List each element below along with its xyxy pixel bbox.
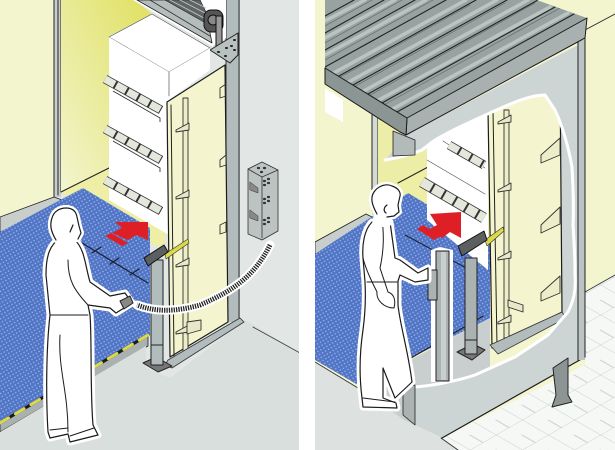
door rails and hinges	[176, 84, 226, 352]
wall-mounted control box	[248, 162, 278, 240]
roof canopy slats	[325, 0, 587, 118]
raised dock door panel	[167, 65, 228, 357]
white goods on pallets	[427, 105, 488, 270]
door frame strip	[54, 0, 61, 197]
operator head	[372, 185, 400, 224]
hand-held remote	[120, 296, 133, 309]
interior grey side behind door	[555, 60, 580, 350]
pallet 1	[105, 79, 161, 122]
door sill	[490, 312, 566, 354]
operator figure	[46, 208, 133, 442]
panel: right scene, operator using fixed control column	[315, 0, 615, 450]
red arrow	[417, 212, 461, 240]
hazard striped edge	[0, 335, 148, 432]
pallet 3	[105, 180, 161, 211]
front corner post	[403, 385, 415, 425]
back wall	[378, 118, 427, 184]
cut-away white outline	[385, 95, 575, 388]
pillar control post	[143, 245, 172, 372]
yellow strap	[485, 227, 504, 246]
left wall	[0, 0, 54, 217]
right post	[578, 25, 585, 360]
operator head	[51, 208, 81, 240]
door frame post	[226, 0, 240, 322]
pallet upper	[449, 145, 484, 165]
pallet 2	[105, 129, 161, 172]
yellow strap	[165, 239, 189, 259]
threshold bar	[0, 197, 62, 232]
wall edge line	[585, 14, 615, 30]
roof fascia	[406, 18, 587, 135]
side wall panel cut-away	[385, 45, 578, 438]
overhead door roller mechanism	[133, 0, 226, 46]
panel: left scene, operator using hand-held remote	[0, 0, 300, 450]
pallet lower	[422, 182, 484, 218]
support leg	[552, 358, 572, 407]
operator figure	[360, 185, 428, 408]
back floor	[61, 168, 165, 250]
ground floor	[315, 362, 458, 450]
door rails and hinges	[498, 110, 560, 338]
blue dock plate	[0, 188, 150, 423]
door sill	[165, 318, 244, 368]
operator hand and arm line	[363, 218, 397, 402]
red direction arrow	[105, 222, 148, 246]
white wall patch	[325, 88, 343, 122]
dock frame strip	[372, 115, 378, 215]
back wall	[61, 0, 152, 192]
operator body	[360, 222, 428, 408]
control column	[428, 247, 453, 382]
dock plate fold line marks	[82, 243, 148, 283]
support pillar	[457, 231, 487, 360]
stacked white goods on pallets	[109, 14, 210, 235]
back floor	[397, 168, 490, 238]
side wall lower edge	[442, 357, 585, 438]
blue dock plate	[315, 193, 490, 385]
raised door panel	[488, 75, 562, 348]
door gear under roof	[393, 131, 415, 156]
roof left edge	[325, 68, 407, 135]
ground floor	[0, 320, 300, 450]
coiled cable	[137, 245, 270, 310]
paved tiles	[442, 275, 615, 450]
threshold bar	[315, 214, 378, 254]
mounting bracket	[210, 33, 238, 63]
operator body	[46, 238, 132, 442]
fold line marks	[404, 234, 464, 268]
